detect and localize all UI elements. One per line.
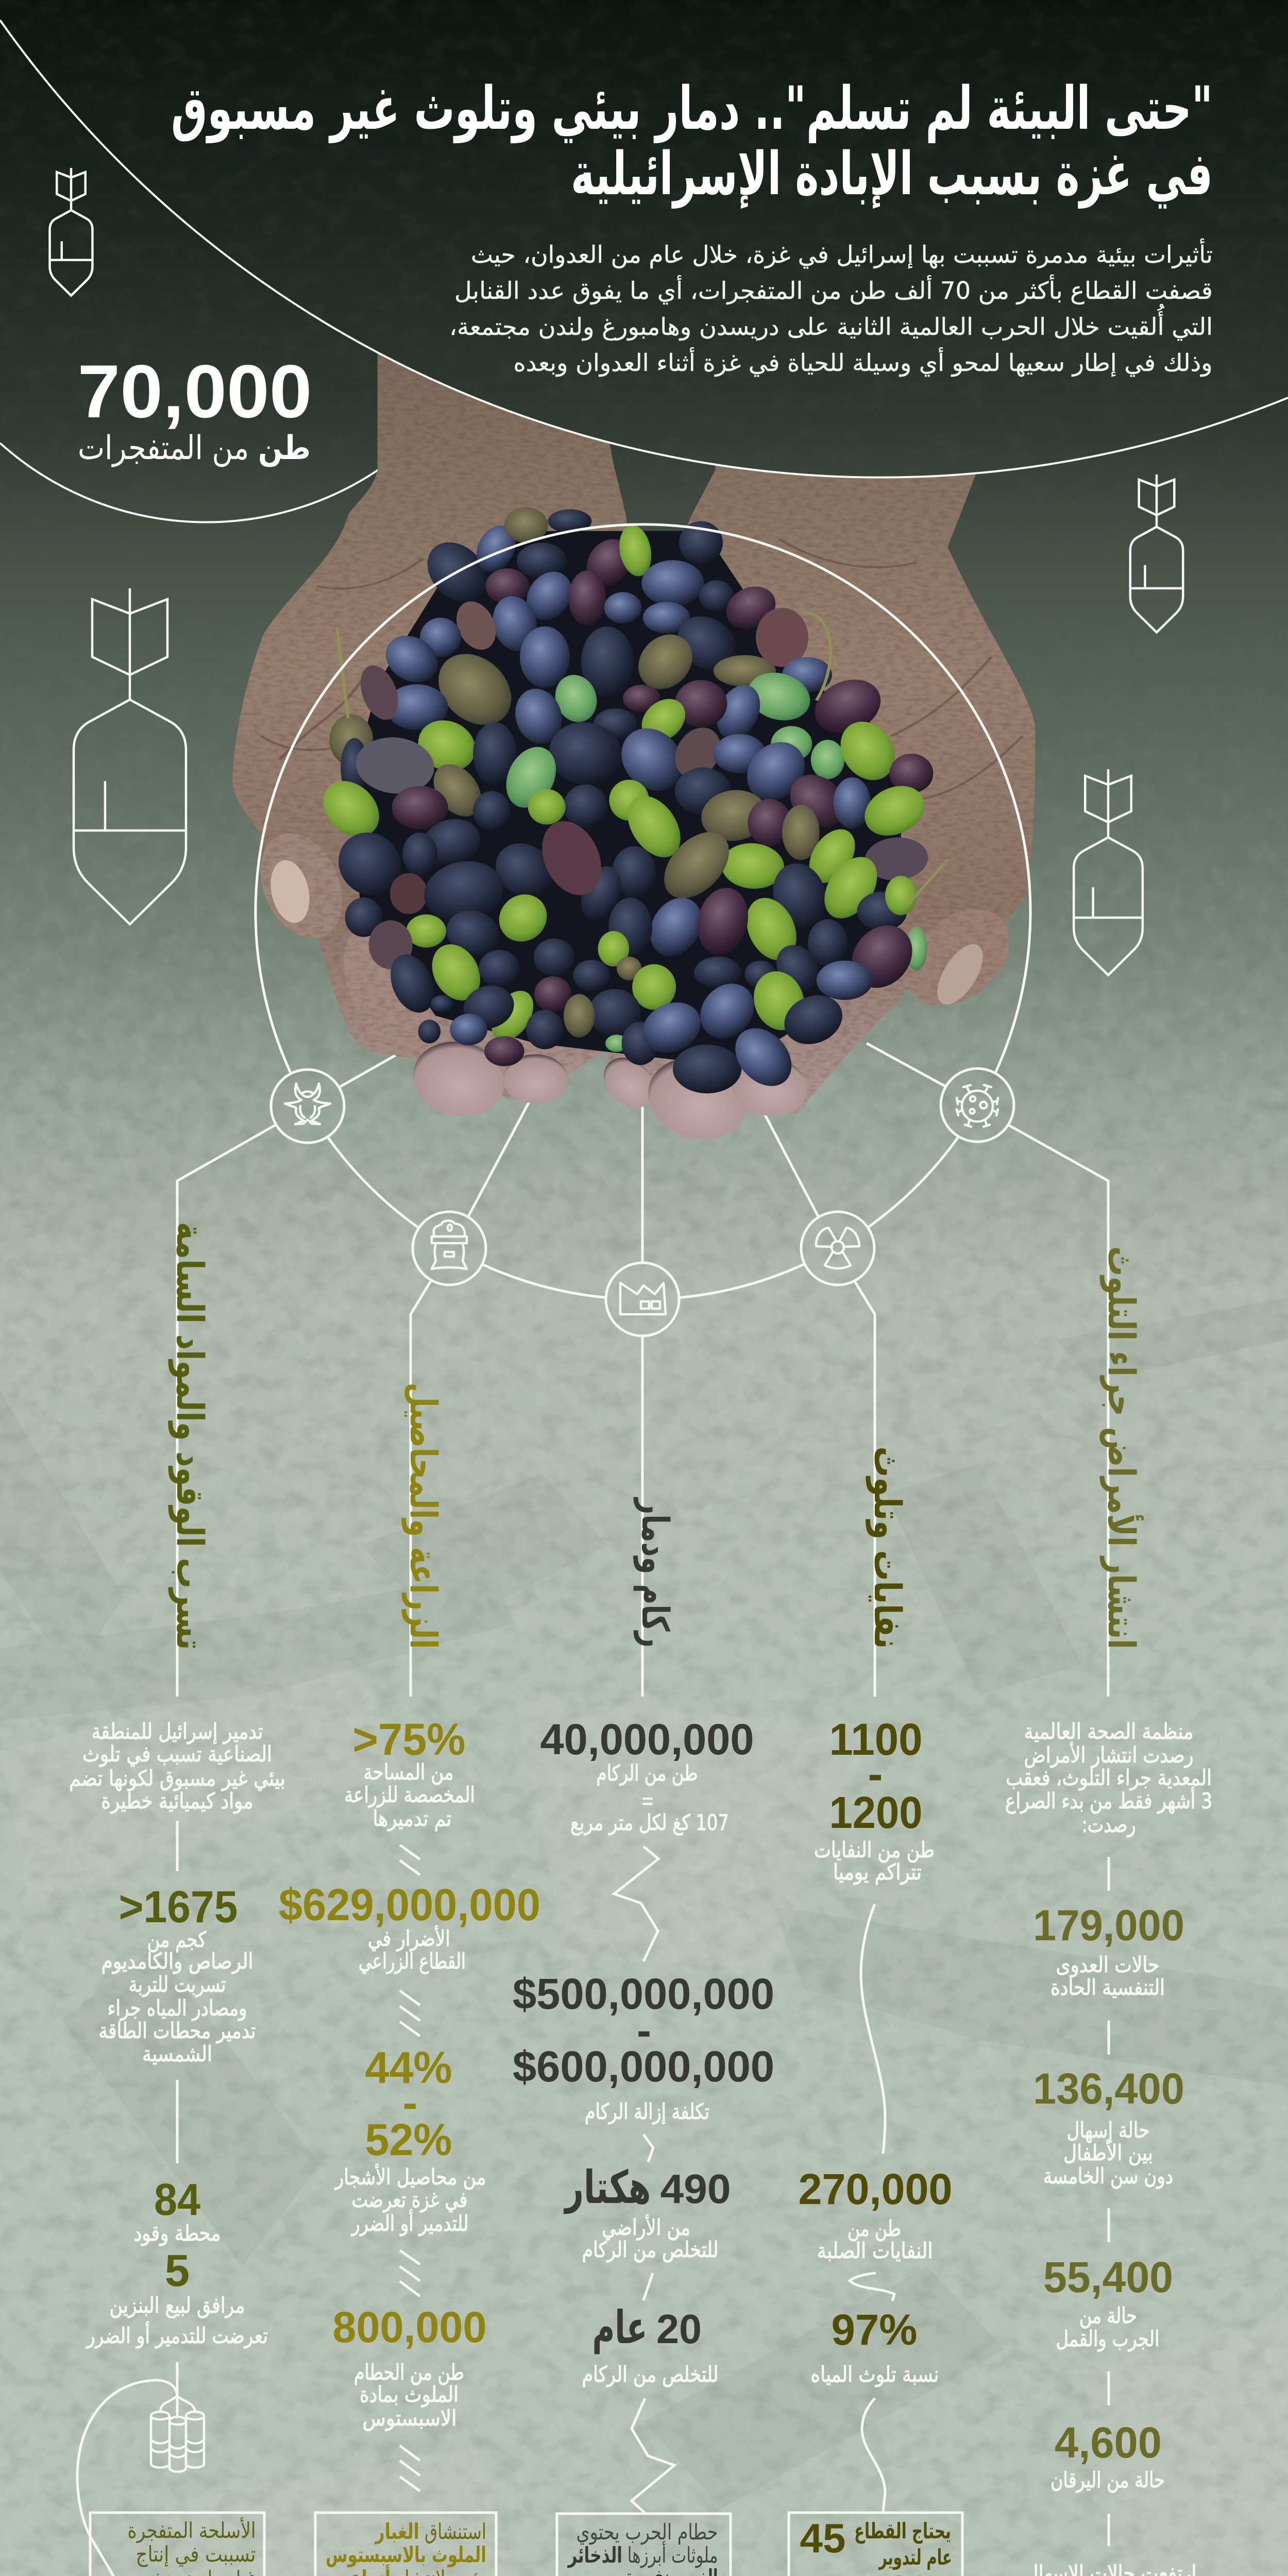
panel: column 4 waste: 97% xyxy=(832,2306,917,2354)
callout: war debris: حطام الحرب يحتوي xyxy=(576,2519,718,2545)
panel: column 1 fuel and toxic materials: 5 xyxy=(165,2246,190,2296)
column heading: spread of diseases: انتشار الأمراض جراء التلوث xyxy=(1099,1246,1144,1649)
panel: column 1 fuel and toxic materials: >1675 xyxy=(118,1882,238,1932)
panel: column 2 agriculture: >75% xyxy=(352,1715,466,1765)
panel: column 2 agriculture: الملوث بمادة xyxy=(360,2382,459,2407)
icon: bomb upper right xyxy=(1130,474,1183,632)
panel: column 1 fuel and toxic materials: تدمير محطات الطاقة xyxy=(99,2018,256,2043)
panel: column 3 rubble: - xyxy=(637,2006,651,2055)
panel: column 2 agriculture: 52% xyxy=(365,2115,452,2165)
headline stat: 70,000 tons: 70,000 xyxy=(77,349,312,433)
panel: column 5 diseases: رصدت انتشار الأمراض xyxy=(1024,1741,1193,1768)
icon: small bomb top left xyxy=(50,168,92,296)
panel: column 2 agriculture: 800,000 xyxy=(333,2303,486,2351)
panel: column 5 diseases: المعدية جراء التلوث، فعقب xyxy=(1006,1765,1212,1790)
icon: bomb right xyxy=(1074,769,1143,975)
panel: column 1 fuel and toxic materials: محطة وقود xyxy=(134,2221,221,2246)
panel: column 2 agriculture: طن من الحطام xyxy=(354,2360,464,2385)
panel: column 4 waste: طن من النفايات xyxy=(814,1837,935,1862)
olives xyxy=(314,507,947,1093)
panel: column 3 rubble: 107 كغ لكل متر مربع xyxy=(570,1810,729,1836)
icon: grain sack xyxy=(413,1212,486,1285)
panel: column 1 fuel and toxic materials: تعرضت للتدمير أو الضرر xyxy=(86,2321,268,2348)
panel: column 2 agriculture: المخصصة للزراعة xyxy=(344,1782,475,1807)
icon: large bomb left xyxy=(74,588,186,924)
panel: column 3 rubble: $600,000,000 xyxy=(513,2042,774,2091)
panel: column 2 agriculture: الأضرار في xyxy=(368,1925,450,1952)
panel: column 2 agriculture: للتدمير أو الضرر xyxy=(351,2209,469,2236)
panel: column 2 agriculture: في غزة تعرضت xyxy=(351,2187,468,2213)
panel: column 3 rubble: للتخلص من الركام xyxy=(582,2362,718,2387)
callout: recycling: عام لتدوير xyxy=(878,2545,952,2570)
panel: column 1 fuel and toxic materials xyxy=(69,1719,285,2348)
callout: recycling xyxy=(789,2513,962,2576)
panel: column 3 rubble: عام xyxy=(592,2301,647,2354)
panel: column 5 diseases: منظمة الصحة العالمية xyxy=(1024,1719,1193,1744)
callout: explosive weapons: تسببت في إنتاج xyxy=(136,2541,256,2567)
panel: column 4 waste: 270,000 xyxy=(799,2165,952,2213)
panel: column 2 agriculture: من محاصيل الأشجار xyxy=(334,2163,486,2190)
panel: column 4 waste: تتراكم يوميا xyxy=(833,1859,922,1885)
intro paragraph: تأثيرات بيئية مدمرة تسببت بها إسرائيل في غزة، خلال عام من العدوان، حيث xyxy=(471,238,1213,269)
connector lines behind the photo xyxy=(338,1043,945,1263)
panel: column 2 agriculture: من المساحة xyxy=(364,1759,453,1785)
callout: asbestos dust: الملوث بالاسبستوس xyxy=(326,2542,486,2568)
panel: column 3 rubble: $500,000,000 xyxy=(513,1970,774,2018)
panel: column 2 agriculture: تم تدميرها xyxy=(373,1806,451,1832)
column heading: rubble and destruction: ركام ودمار xyxy=(633,1497,677,1648)
panel: column 5 diseases: رصدت: xyxy=(1082,1812,1136,1837)
panel: column 1 fuel and toxic materials: مواد كيميائية خطيرة xyxy=(101,1788,253,1814)
big circle over the photo xyxy=(256,524,1030,1298)
callout: explosive weapons xyxy=(90,2513,264,2576)
panel: column 3 rubble: طن من الركام xyxy=(597,1760,698,1786)
connector lines to columns xyxy=(177,1125,1108,1697)
panel: column 4 waste: 1100 xyxy=(829,1715,922,1765)
panel: column 1 fuel and toxic materials: الصناعية تسبب في تلوث xyxy=(82,1741,272,1767)
panel: column 1 fuel and toxic materials: تدمير إسرائيل للمنطقة xyxy=(92,1719,263,1744)
icon: factory xyxy=(606,1263,679,1336)
panel: column 5 diseases: حالة إسهال xyxy=(1066,2117,1150,2143)
intro paragraph xyxy=(449,238,1213,377)
intro paragraph: وذلك في إطار سعيها لمحو أي وسيلة للحياة في غزة أثناء العدوان وبعده xyxy=(513,347,1213,377)
decorative lower-left arc around the 70,000 stat xyxy=(0,443,381,522)
panel: column 5 diseases: بين الأطفال xyxy=(1063,2139,1153,2165)
callout: war debris xyxy=(557,2514,731,2576)
panel: column 4 waste: 1200 xyxy=(829,1788,922,1838)
panel: column 2 agriculture: 44% xyxy=(365,2043,452,2093)
panel: column 2 agriculture: الاسبستوس xyxy=(363,2405,456,2431)
panel: column 5 diseases: 136,400 xyxy=(1033,2064,1184,2113)
panel: column 3 rubble: للتخلص من الركام xyxy=(582,2237,718,2262)
callout: recycling: يحتاج القطاع xyxy=(854,2518,951,2544)
callout: war debris: ملوثات أبرزها الذخائر xyxy=(567,2541,718,2568)
panel: column 5 diseases: 179,000 xyxy=(1033,1901,1184,1950)
panel: column 3 rubble: = xyxy=(642,1791,653,1812)
panel: column 3 rubble: من الأراضي xyxy=(602,2214,690,2241)
callout: asbestos dust: استنشاق الغبار xyxy=(374,2519,486,2544)
panel: column 1 fuel and toxic materials: الشمسية xyxy=(142,2041,212,2066)
panel: column 5 diseases xyxy=(1005,1719,1212,2576)
panel: column 4 waste xyxy=(799,1715,952,2513)
panel: column 4 waste: طن من xyxy=(848,2216,901,2241)
callout: asbestos dust xyxy=(315,2513,496,2576)
title xyxy=(171,74,1213,209)
panel: column 5 diseases: دون سن الخامسة xyxy=(1043,2163,1173,2189)
panel: column 3 rubble: 40,000,000 xyxy=(540,1715,754,1764)
icon: virus xyxy=(941,1069,1014,1142)
panel: column 3 rubble: هكتار xyxy=(564,2161,651,2214)
panel: column 5 diseases: التنفسية الحادة xyxy=(1050,1975,1165,2000)
panel: column 3 rubble: 490 xyxy=(660,2166,731,2212)
panel: column 5 diseases: حالة من xyxy=(1079,2303,1137,2328)
panel: column 5 diseases: حالة من اليرقان xyxy=(1050,2467,1165,2493)
panel: column 5 diseases: الجرب والقمل xyxy=(1056,2326,1159,2351)
icon: dynamite with fuse xyxy=(77,2363,204,2576)
intro paragraph: قصفت القطاع بأكثر من 70 ألف طن من المتفجرات، أي ما يفوق عدد القنابل xyxy=(454,274,1213,305)
panel: column 1 fuel and toxic materials: الرصاص والكامديوم xyxy=(101,1948,253,1974)
panel: column 5 diseases: حالات العدوى xyxy=(1056,1952,1159,1977)
panel: column 3 rubble xyxy=(513,1715,774,2514)
panel: column 1 fuel and toxic materials: بيئي غير مسبوق لكونها تضم xyxy=(69,1766,285,1791)
panel: column 1 fuel and toxic materials: ومصادر المياه جراء xyxy=(107,1995,247,2021)
panel: column 3 rubble: 20 xyxy=(656,2306,702,2352)
headline stat: 70,000 tons: طن من المتفجرات xyxy=(78,429,311,467)
panel: column 2 agriculture: القطاع الزراعي xyxy=(359,1948,466,1974)
headline stat: 70,000 tons xyxy=(77,349,312,467)
photo: two hands holding olives xyxy=(233,346,1035,1145)
intro paragraph: التي أُلقيت خلال الحرب العالمية الثانية على دريسدن وهامبورغ ولندن مجتمعة، xyxy=(449,304,1213,341)
panel: column 2 agriculture: - xyxy=(403,2078,417,2128)
panel: column 5 diseases: 4,600 xyxy=(1055,2418,1162,2467)
panel: column 4 waste: النفايات الصلبة xyxy=(817,2238,933,2263)
panel: column 5 diseases: 3 أشهر فقط من بدء الصراع xyxy=(1005,1787,1212,1814)
panel: column 2 agriculture: $629,000,000 xyxy=(279,1880,540,1930)
panel: column 4 waste: - xyxy=(868,1749,883,1799)
panel: column 1 fuel and toxic materials: مرافق لبيع البنزين xyxy=(109,2293,245,2318)
column heading: waste and pollution: نفايات وتلوث xyxy=(866,1447,909,1649)
callout: explosive weapons: الأسلحة المتفجرة xyxy=(128,2517,256,2543)
panel: column 5 diseases: 55,400 xyxy=(1043,2253,1173,2301)
panel: column 2 agriculture xyxy=(279,1715,540,2491)
panel: column 4 waste: نسبة تلوث المياه xyxy=(811,2362,939,2387)
panel: column 1 fuel and toxic materials: 84 xyxy=(154,2175,200,2225)
callout: recycling: 45 xyxy=(800,2515,846,2561)
column heading: fuel and toxic leak: تسرب الوقود والمواد السامة xyxy=(168,1222,212,1650)
icon: radiation xyxy=(801,1212,874,1285)
main top arc xyxy=(0,20,1288,478)
panel: column 3 rubble: تكلفة إزالة الركام xyxy=(585,2099,709,2125)
panel: column 1 fuel and toxic materials: كجم من xyxy=(147,1927,206,1953)
icon: biohazard creature xyxy=(271,1070,344,1143)
column heading: agriculture and crops: الزراعة والمحاصيل xyxy=(401,1383,445,1649)
panel: column 1 fuel and toxic materials: تسربت للتربة xyxy=(129,1972,226,1997)
